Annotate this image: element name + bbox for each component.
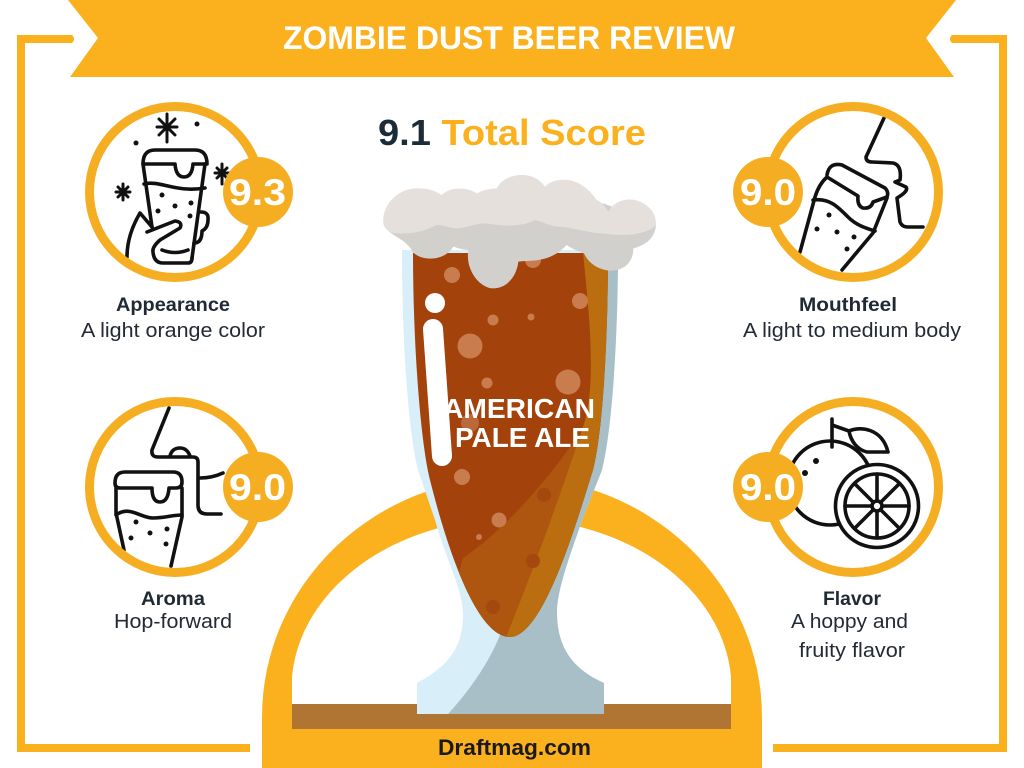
- icon: drinking from glass: [800, 118, 923, 270]
- beer style label: PALE ALE: [455, 422, 590, 453]
- description: Hop-forward: [114, 611, 232, 633]
- score badge: 9.3: [229, 172, 286, 213]
- total score heading: 9.1 Total Score: [378, 112, 646, 153]
- panel: flavor: [733, 402, 938, 662]
- panel: mouthfeel: [733, 106, 961, 342]
- website credit: Draftmag.com: [438, 735, 591, 760]
- beer glass illustration: [383, 175, 656, 714]
- score badge: 9.0: [229, 467, 286, 508]
- glass: [402, 250, 618, 714]
- ring: [90, 402, 260, 572]
- title: ZOMBIE DUST BEER REVIEW: [283, 20, 736, 56]
- base arch: [262, 477, 762, 768]
- description: A hoppy and: [791, 611, 908, 633]
- title banner: [68, 0, 956, 77]
- score badge: [733, 452, 803, 522]
- panel: aroma: [90, 402, 293, 633]
- beer style label: AMERICAN: [443, 393, 595, 424]
- icon: hand holding beer: [116, 114, 229, 263]
- score badge: [223, 452, 293, 522]
- beer: [413, 253, 608, 637]
- icon: nose smelling glass: [115, 408, 223, 566]
- heading: Flavor: [823, 589, 882, 610]
- score badge: [733, 157, 803, 227]
- bubbles: [444, 252, 588, 614]
- heading: Mouthfeel: [799, 295, 897, 316]
- score badge: 9.0: [740, 467, 796, 508]
- description: A light orange color: [81, 320, 265, 342]
- score badge: 9.0: [740, 172, 796, 213]
- heading: Appearance: [116, 295, 230, 316]
- foam: [383, 175, 656, 288]
- panel: appearance: [81, 106, 293, 342]
- ring: [90, 106, 260, 278]
- heading: Aroma: [141, 589, 205, 610]
- ring: [768, 106, 938, 278]
- score badge: [223, 157, 293, 227]
- description: A light to medium body: [743, 320, 961, 342]
- description: [791, 611, 908, 662]
- ring: [768, 402, 938, 572]
- description: fruity flavor: [799, 640, 905, 662]
- info icon: [425, 293, 445, 456]
- table bar: [292, 704, 731, 729]
- icon: orange and slice: [788, 419, 918, 548]
- beer style label: [443, 393, 595, 453]
